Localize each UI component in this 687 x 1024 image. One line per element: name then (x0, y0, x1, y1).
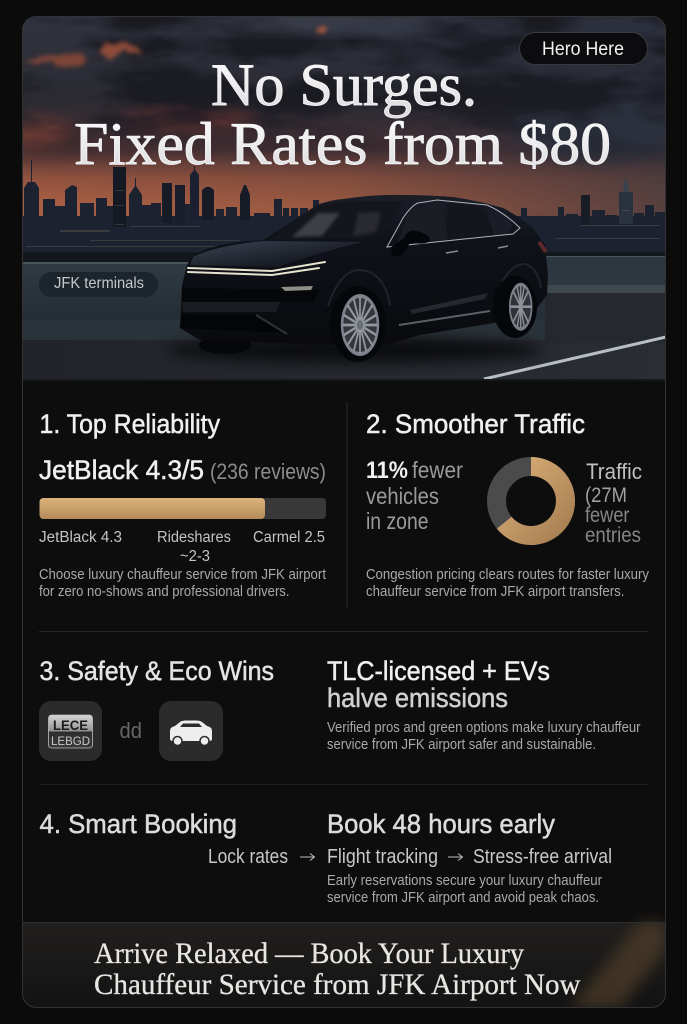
donut chart (496, 466, 566, 536)
icon: licence plate: LECE (53, 717, 88, 733)
flow: booking steps: Flight tracking (327, 846, 438, 868)
flow: booking steps: Stress-free arrival (473, 846, 612, 868)
window chrome (387, 200, 520, 247)
pill: Hero Here (520, 32, 648, 64)
heading: 2. Smoother Traffic (366, 409, 585, 439)
bar labels: Rideshares (157, 529, 231, 546)
stat: 11% fewer vehicles (366, 461, 463, 529)
flow: booking steps (208, 846, 612, 868)
tail light (539, 242, 546, 252)
stat headline: Book 48 hours early (327, 809, 555, 839)
skyline lights (26, 190, 660, 247)
bar labels: Carmel 2.5 (253, 529, 325, 546)
body text: Early reservations secure your luxury chauffeur (327, 873, 602, 889)
body text: service from JFK airport safer and sustainable. (327, 737, 596, 753)
hero title: Fixed Rates from $80 (74, 111, 611, 177)
stat: 11% fewer vehicles: vehicles (366, 483, 439, 509)
icon: licence plate: LEBGD (51, 734, 90, 748)
stat: 11% fewer vehicles: fewer (412, 457, 463, 483)
panel 4: smart booking (40, 809, 612, 906)
front wheel (334, 286, 382, 362)
stat headline: halve emissions (327, 683, 508, 713)
flow: booking steps: Lock rates (208, 846, 288, 868)
rear wheel (493, 276, 537, 338)
bar labels: ~2-3 (180, 548, 210, 565)
body text: Verified pros and green options make luxury chauffeur (327, 720, 641, 736)
donut label (585, 463, 642, 542)
heading: 4. Smart Booking (40, 809, 237, 839)
windshield (327, 201, 402, 206)
donut label: (27M (585, 484, 627, 507)
bar labels: JetBlack 4.3 (39, 529, 122, 546)
rating headline (39, 459, 325, 484)
donut label: fewer (585, 504, 630, 527)
black SUV (165, 195, 548, 363)
body text: for zero no-shows and professional drivers. (39, 584, 290, 600)
body text: chauffeur service from JFK airport transfers. (366, 584, 624, 600)
stat headline: TLC-licensed + EVs (327, 656, 550, 686)
call to action band: Chauffeur Service from JFK Airport Now (94, 968, 581, 1001)
body text (327, 873, 602, 906)
stat headline (327, 656, 550, 713)
arrow (300, 854, 314, 860)
panel 2: smoother traffic (366, 409, 650, 600)
hero title: No Surges. (211, 52, 477, 118)
body text: Choose luxury chauffeur service from JFK airport (39, 567, 326, 583)
skyline (22, 160, 666, 256)
body text (327, 720, 641, 753)
call to action band: Arrive Relaxed — Book Your Luxury (94, 937, 524, 970)
headlight strip (188, 262, 325, 275)
wheel arches (328, 264, 541, 306)
hood (190, 241, 363, 267)
heading: 1. Top Reliability (40, 409, 220, 439)
pill: JFK terminals: JFK terminals (54, 275, 144, 292)
pill: Hero Here: Hero Here (542, 39, 624, 60)
panel 1: top reliability (39, 409, 326, 600)
car body (180, 195, 548, 345)
front grille (182, 288, 320, 302)
pill: JFK terminals (39, 272, 158, 297)
icon: car (159, 701, 223, 761)
body text: service from JFK airport and avoid peak chaos. (327, 890, 599, 906)
mirror (391, 231, 430, 256)
stat: 11% fewer vehicles: in zone (366, 508, 428, 534)
side windows (398, 229, 448, 242)
bar labels (39, 530, 324, 561)
arrow (448, 854, 462, 860)
door handles (446, 246, 508, 253)
rating bar (40, 498, 326, 519)
stat: 11% fewer vehicles: 11% (366, 457, 408, 484)
body text (39, 567, 326, 600)
body text: Congestion pricing clears routes for faster luxury (366, 567, 650, 583)
rating headline: (236 reviews) (210, 459, 326, 484)
icon: licence plate (39, 701, 102, 761)
sky glow patches (23, 104, 663, 166)
call to action band (22, 922, 666, 1008)
door crease and sill (410, 293, 488, 314)
road lane marking (484, 337, 666, 379)
body text (366, 567, 650, 600)
donut label: entries (585, 524, 641, 547)
panel 3: safety and eco wins (39, 656, 641, 761)
hero title (75, 64, 610, 169)
hero photo: car on a highway at dusk with city skyline (5, 16, 687, 380)
road and wall (23, 340, 665, 379)
donut label: Traffic (586, 459, 642, 484)
rating headline: JetBlack 4.3/5 (39, 455, 204, 485)
connector text: dd (120, 718, 142, 743)
heading: 3. Safety & Eco Wins (40, 656, 274, 686)
